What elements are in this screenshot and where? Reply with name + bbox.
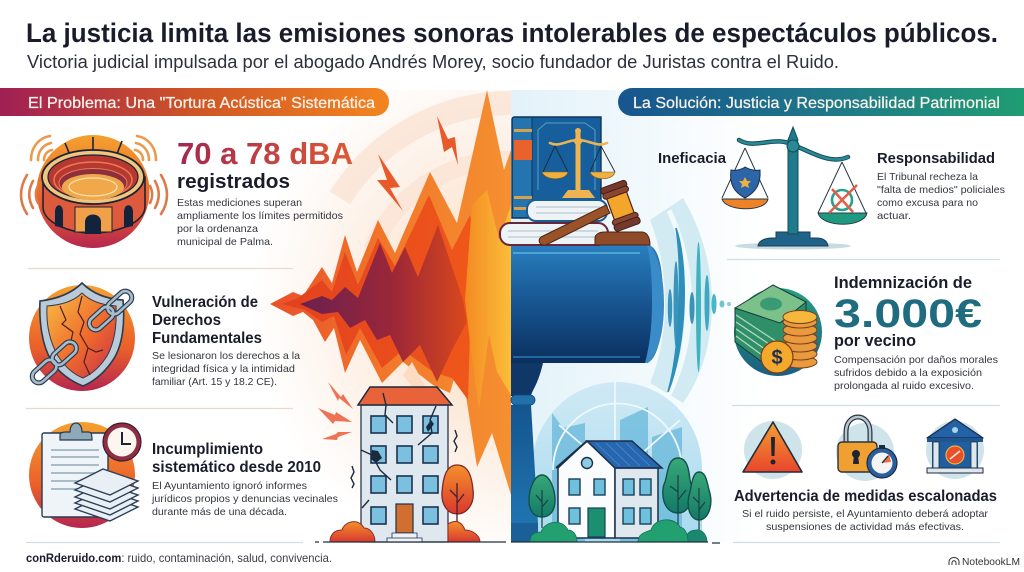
stat: decibels: registrados [177, 170, 290, 193]
footer source: conRderuido.com: ruido, contaminación, salud, convivencia. [26, 551, 332, 565]
text: responsibility: como excusa para no [877, 197, 978, 209]
icon: money stack and coins: $ [771, 347, 783, 369]
title: La justicia limita las emisiones sonoras intolerables de espectáculos públicos. [26, 18, 998, 48]
heading band: solution [618, 88, 1024, 116]
text: responsibility [877, 151, 1005, 222]
stat: decibels: municipal de Palma. [177, 236, 273, 248]
central illustration: noise waveform against justice [250, 90, 761, 543]
stat: compensation: sufridos debido a la exposición [834, 367, 982, 379]
heading band: solution: La Solución: Justicia y Responsabilidad Patrimonial [633, 95, 1000, 112]
stat: decibels: 70 a 78 dBA [177, 136, 353, 171]
law column [511, 363, 543, 542]
panel: problem [0, 88, 389, 542]
text: systematic non-compliance: durante más de una década. [152, 506, 287, 518]
text: escalated measures [734, 488, 997, 533]
text: escalated measures: Si el ruido persiste, el Ayuntamiento deberá adoptar [742, 508, 989, 520]
text: systematic non-compliance: El Ayuntamiento ignoró informes [152, 480, 307, 492]
damaged apartment building [351, 387, 457, 542]
gavel [539, 180, 650, 245]
text: fundamental rights [152, 294, 300, 388]
stat: compensation: Indemnización de [834, 274, 972, 292]
NotebookLM mark: NotebookLM [962, 556, 1020, 568]
text: fundamental rights: Vulneración de [152, 294, 258, 311]
sound waves leaving the silencer [650, 198, 731, 403]
text: responsibility: Responsabilidad [877, 151, 995, 167]
concentric sound arcs [340, 103, 511, 250]
stat: decibels [177, 136, 353, 248]
icon: clipboard, clock and papers [29, 422, 141, 528]
text: responsibility: El Tribunal recheza la [877, 171, 978, 183]
stat: compensation: prolongada al ruido excesivo. [834, 380, 974, 392]
orange tree [442, 465, 473, 542]
icon: padlock and stopwatch [836, 417, 897, 481]
law books and scales [500, 117, 615, 245]
icon: warning triangle [743, 421, 802, 479]
text: systematic non-compliance: sistemático desde 2010 [152, 459, 321, 476]
text: responsibility: "falta de medios" policiales [877, 184, 1005, 196]
text: fundamental rights: integridad física y la intimidad [152, 363, 295, 375]
silencing block [511, 245, 664, 363]
icon: cracked shield and broken chain [29, 283, 135, 391]
text: responsibility: actuar. [877, 210, 911, 222]
icon: money stack and coins [734, 285, 822, 376]
text: fundamental rights: Se lesionaron los derechos a la [152, 350, 300, 362]
subtitle: Victoria judicial impulsada por el abogado Andrés Morey, socio fundador de Juristas contra el Ruido. [27, 51, 839, 72]
lightning bolts [318, 116, 458, 440]
panel: solution [618, 88, 1024, 542]
stat: compensation [834, 274, 998, 392]
stat: decibels: por la ordenanza [177, 223, 258, 235]
icon: bullring with sound waves [21, 135, 167, 248]
renovated house [556, 441, 662, 538]
orange bushes [330, 522, 480, 542]
text: escalated measures: suspensiones de actividad más efectivas. [766, 521, 964, 533]
text: fundamental rights: Derechos [152, 312, 221, 329]
stat: compensation: 3.000€ [834, 292, 982, 336]
background, solution side [511, 90, 761, 542]
green bushes [530, 520, 707, 542]
text: fundamental rights: familiar (Art. 15 y 18.2 CE). [152, 376, 277, 388]
heading band: problem [0, 88, 389, 116]
text: fundamental rights: Fundamentales [152, 330, 262, 347]
stat: compensation: por vecino [834, 331, 916, 350]
text: escalated measures: Advertencia de medidas escalonadas [734, 488, 997, 505]
stat: compensation: Compensación por daños morales [834, 354, 998, 366]
stat: decibels: Estas mediciones superan [177, 197, 302, 209]
waveform [270, 90, 511, 495]
heading band: problem: El Problema: Una "Tortura Acústica" Sistemática [28, 95, 375, 112]
glass dome and city [532, 382, 702, 542]
icon: town hall with stop seal [926, 419, 984, 479]
green trees [529, 458, 711, 532]
icon: balance scale [722, 127, 867, 250]
label: ineffectiveness: Ineficacia [658, 151, 727, 167]
ground line [315, 541, 506, 543]
text: systematic non-compliance: jurídicos propios y denuncias vecinales [151, 493, 338, 505]
text: systematic non-compliance [151, 441, 338, 518]
text: systematic non-compliance: Incumplimiento [152, 441, 263, 458]
stat: decibels: ampliamente los límites permitidos [177, 210, 343, 222]
background glow, problem side [250, 90, 511, 542]
